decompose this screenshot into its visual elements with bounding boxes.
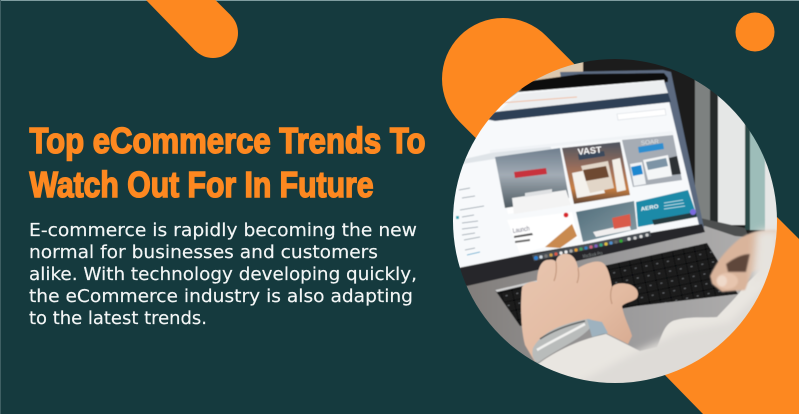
body paragraph: alike. With technology developing quickly, [29, 265, 417, 285]
keyboard [495, 243, 738, 326]
circular photo: laptop and hands [445, 55, 782, 392]
template card aero [636, 190, 697, 227]
search box [617, 109, 666, 120]
orange pill shape at top [146, 0, 238, 58]
sidebar filters [459, 188, 484, 255]
laptop base [466, 225, 759, 364]
filter row [460, 146, 552, 164]
body paragraph: normal for businesses and customers [29, 243, 378, 263]
title: Top eCommerce Trends To [30, 120, 426, 161]
shirt sleeve [538, 272, 768, 383]
template card aero: AERO [640, 204, 660, 213]
template card launch: Launch [512, 225, 530, 235]
template card 2: VAST [577, 144, 603, 157]
finger shadows [554, 262, 612, 304]
browser chrome [502, 82, 668, 111]
template card 3 [622, 135, 682, 187]
body paragraph [29, 221, 417, 329]
template card launch [512, 212, 578, 249]
right hand [710, 229, 780, 292]
room background [506, 59, 777, 240]
title: Watch Out For In Future [30, 164, 374, 205]
laptop lid frame [560, 70, 704, 240]
template card 1 [495, 148, 571, 214]
template card kinx [576, 201, 637, 242]
template card 2 [562, 142, 630, 204]
body paragraph: to the latest trends. [29, 309, 207, 329]
dock icons [532, 231, 651, 261]
laptop screen [445, 80, 699, 270]
body paragraph: the eCommerce industry is also adapting [29, 287, 413, 307]
left hand [521, 254, 638, 362]
orange pill behind photo [503, 79, 600, 176]
orange corner shape bottom right [660, 217, 799, 414]
watch [532, 319, 608, 366]
laptop model label: MacBook Pro [582, 251, 603, 260]
body paragraph: E-commerce is rapidly becoming the new [29, 221, 417, 241]
template card 3: SOAR [641, 139, 660, 147]
navigation bar [486, 93, 671, 121]
orange circle top right [736, 12, 774, 52]
laptop bottom bezel [448, 224, 705, 290]
title [30, 120, 426, 205]
